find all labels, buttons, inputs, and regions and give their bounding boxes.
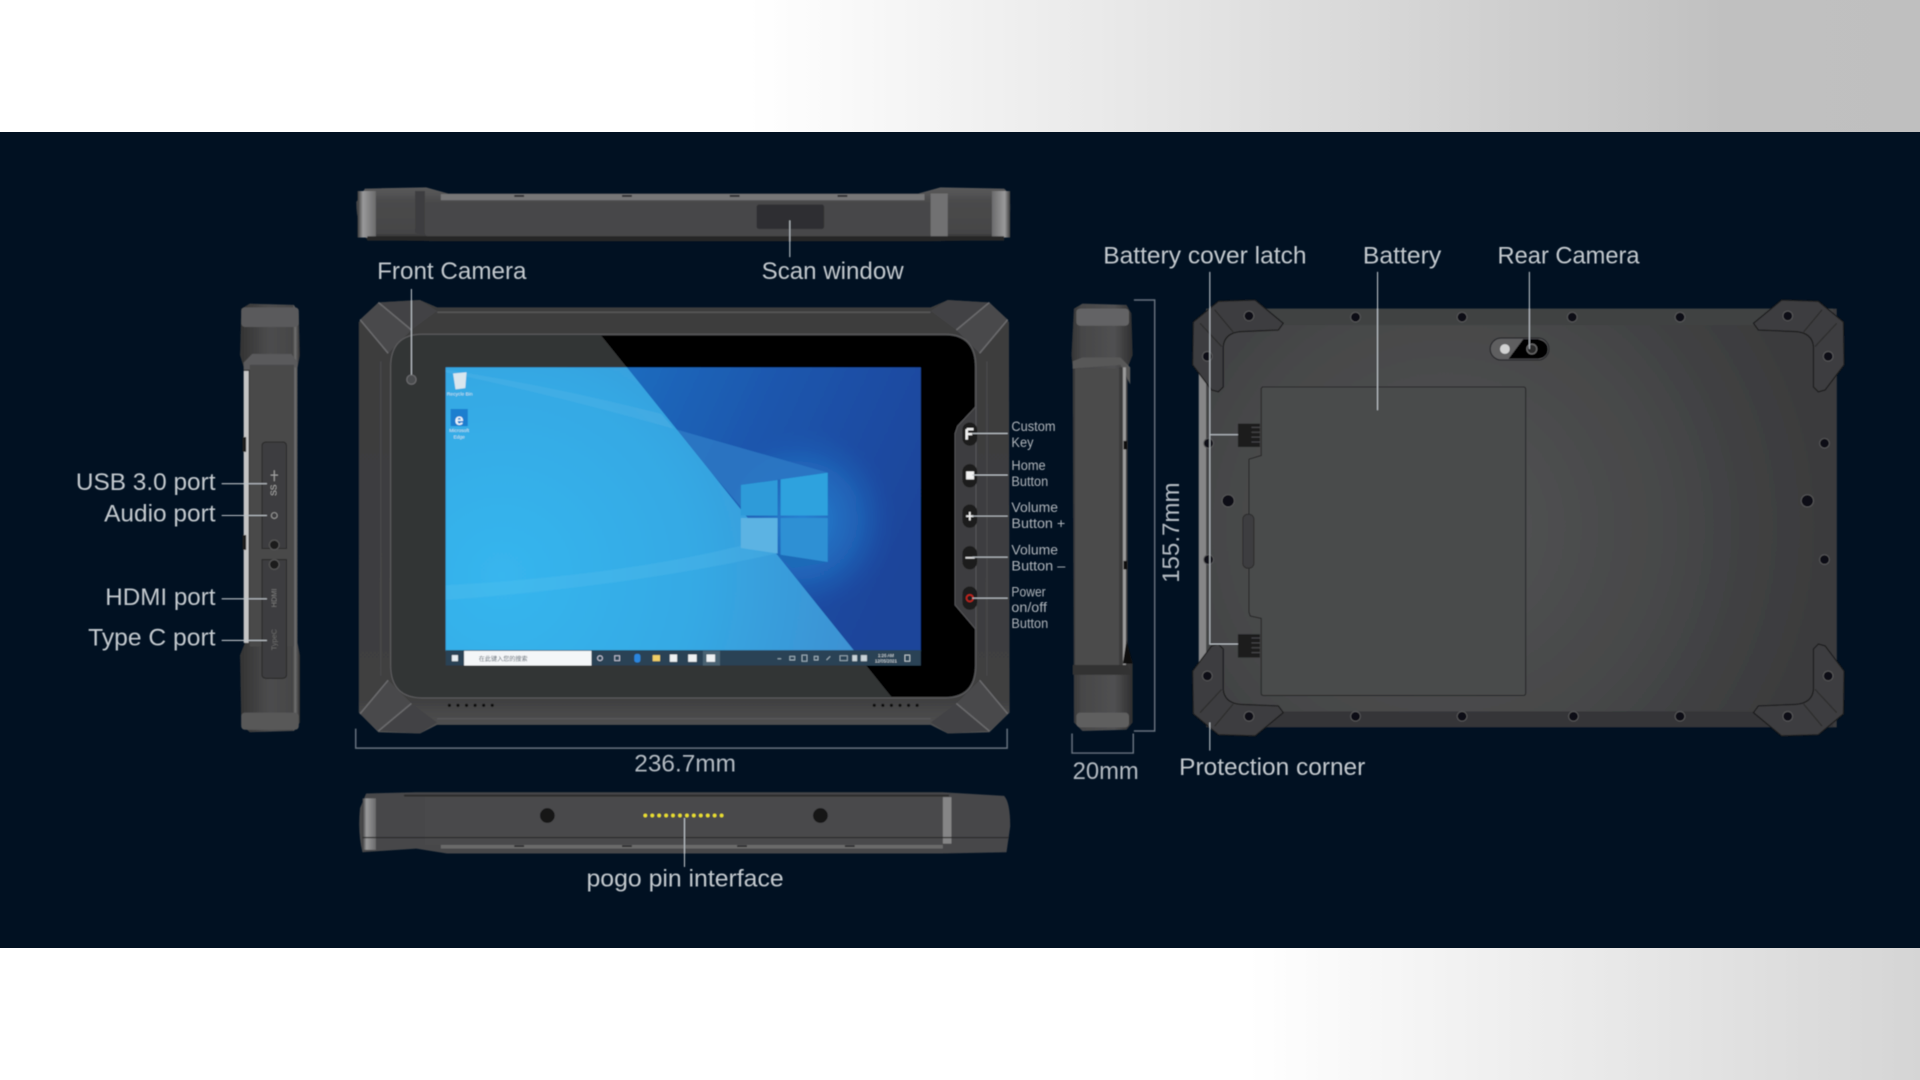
tablet right side view [1071,304,1133,731]
button labels: Button – [1011,559,1066,574]
desktop icon: edge shortcut: Edge [453,434,465,440]
dark navy panel [0,132,1920,948]
battery latches [1238,424,1260,658]
dimension: width 236.7mm: 236.7mm [634,750,736,777]
desktop icon: edge shortcut: e [455,412,464,429]
label: pogo pin interface: pogo pin interface [587,866,784,893]
button labels: Power [1011,584,1046,599]
tablet front view: 12/05/2021 [875,658,897,663]
buttons [962,422,977,610]
label: battery cover latch [1103,242,1307,644]
tablet left side view [240,304,300,732]
button labels: Volume [1011,500,1058,515]
bottom gradient strip [0,948,1920,1080]
speaker grilles [448,704,919,707]
label: HDMI port: HDMI port [105,584,216,611]
desktop icon: edge shortcut: Microsoft [449,428,470,434]
tablet left side view: TypeC [270,628,279,650]
button labels: Button [1011,474,1048,489]
button labels [972,419,1066,631]
tablet front view: 在此键入您的搜索 [479,655,528,663]
tablet front view [359,300,1010,733]
taskbar [446,650,921,666]
desktop icon: recycle bin [447,372,473,398]
label: USB 3.0 port: USB 3.0 port [76,469,216,496]
bezel reflection [601,336,975,697]
tablet front view: 1:26 AM [878,653,894,658]
dimension: height 155.7mm: 155.7mm [1158,482,1185,583]
front camera lens [407,375,416,384]
tablet left side view: HDMI [270,589,279,607]
corner bumpers [360,300,1008,733]
label: battery: Battery [1363,242,1442,269]
button labels: Custom [1011,419,1056,434]
frame [359,300,1010,733]
tablet back view [1193,300,1844,736]
label: protection corner: Protection corner [1179,754,1365,781]
dimension: thickness 20mm: 20mm [1073,758,1139,785]
protection corners [1193,300,1844,736]
desktop icon: edge shortcut [449,409,470,440]
label: scan window: Scan window [762,258,904,285]
port cover lower [262,560,287,678]
bezel [391,334,976,698]
bottom edge view with pogo pins [359,792,1010,853]
button labels: Volume [1011,543,1058,558]
button labels: on/off [1011,600,1047,615]
pogo pins [643,814,723,817]
label: type C port: Type C port [88,624,216,651]
label: front camera: Front Camera [377,258,527,285]
dimension: width 236.7mm [356,729,1007,777]
rear camera module [1490,338,1549,360]
button labels: Button + [1011,516,1065,531]
label: rear camera: Rear Camera [1498,242,1640,269]
scan window [757,204,824,229]
dimension: height 155.7mm [1134,300,1185,731]
label: audio port: Audio port [104,501,216,528]
port cover upper [262,442,287,549]
windows logo [741,480,778,516]
wallpaper [446,367,921,651]
tablet top edge view [356,187,1010,241]
tablet left side view: SS [269,484,279,496]
top gradient strip [0,0,1920,132]
desktop icon: recycle bin: Recycle Bin [447,392,473,398]
dimension: thickness 20mm [1072,733,1139,785]
screws [1202,311,1833,721]
battery cover [1249,387,1526,696]
main artwork [76,187,1844,893]
button labels: Home [1011,458,1046,473]
button strip [955,407,976,629]
label: battery cover latch: Battery cover latch [1103,242,1307,269]
button labels: Key [1011,435,1034,450]
button labels: Button [1011,616,1048,631]
